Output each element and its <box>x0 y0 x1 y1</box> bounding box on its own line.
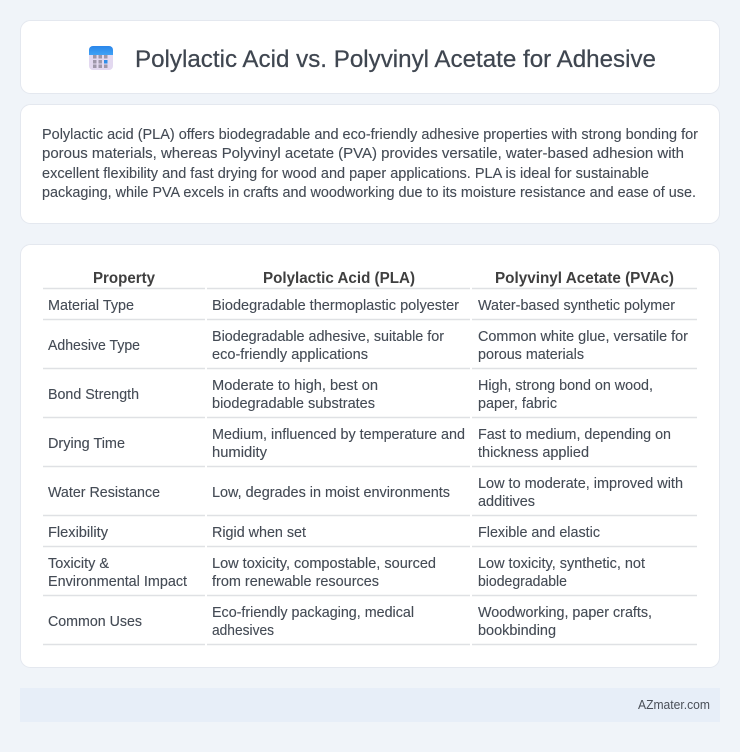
panel: description <box>20 104 720 224</box>
panel: comparison table <box>20 244 720 668</box>
row: common uses: Common Uses <box>48 614 142 630</box>
row: adhesive type: Adhesive Type <box>48 338 140 354</box>
row: drying time: Medium, influenced by temperature and <box>212 427 465 443</box>
row: material type <box>48 298 675 314</box>
table header: Property <box>93 270 155 287</box>
row: drying time: thickness applied <box>478 445 589 461</box>
row: toxicity and environmental impact <box>48 556 645 590</box>
row: bond strength: Moderate to high, best on <box>212 378 378 394</box>
row: toxicity and environmental impact: Toxicity & <box>48 556 109 572</box>
row: water resistance: Water Resistance <box>48 485 160 501</box>
row: water resistance <box>48 476 683 510</box>
row: common uses: Woodworking, paper crafts, <box>478 605 652 621</box>
row: drying time: humidity <box>212 445 268 461</box>
description text: Polylactic acid (PLA) offers biodegradable and eco-friendly adhesive properties with strong bonding for <box>42 127 698 143</box>
row: material type: Water-based synthetic polymer <box>478 298 675 314</box>
row: water resistance: additives <box>478 494 535 510</box>
row: water resistance: Low, degrades in moist environments <box>212 485 450 501</box>
row: adhesive type: Biodegradable adhesive, suitable for <box>212 329 444 345</box>
row: bond strength: High, strong bond on wood, <box>478 378 653 394</box>
row: toxicity and environmental impact: Low toxicity, compostable, sourced <box>212 556 436 572</box>
row: common uses: Eco-friendly packaging, medical <box>212 605 414 621</box>
row: bond strength: paper, fabric <box>478 396 557 412</box>
row: drying time <box>48 427 671 461</box>
table header: Polyvinyl Acetate (PVAc) <box>495 270 674 287</box>
row: toxicity and environmental impact: from renewable resources <box>212 574 379 590</box>
row: toxicity and environmental impact: Low toxicity, synthetic, not <box>478 556 645 572</box>
row: flexibility <box>48 525 600 541</box>
row: material type: Material Type <box>48 298 134 314</box>
row: adhesive type: porous materials <box>478 347 584 363</box>
row: adhesive type: eco-friendly applications <box>212 347 368 363</box>
table header: Polylactic Acid (PLA) <box>263 270 415 287</box>
footer source text: AZmater.com <box>638 698 710 712</box>
row: water resistance: Low to moderate, improved with <box>478 476 683 492</box>
footer <box>20 688 720 722</box>
title: Polylactic Acid vs. Polyvinyl Acetate for Adhesive <box>135 46 656 73</box>
row: adhesive type: Common white glue, versatile for <box>478 329 688 345</box>
row: adhesive type <box>48 329 688 363</box>
row: common uses: adhesives <box>212 623 274 639</box>
description text: packaging, while PVA excels in crafts and woodworking due to its moisture resistance and ease of use. <box>42 185 696 201</box>
row: bond strength <box>48 378 653 412</box>
row: toxicity and environmental impact: Environmental Impact <box>48 574 187 590</box>
row: bond strength: Bond Strength <box>48 387 139 403</box>
row: common uses <box>48 605 652 639</box>
description text: porous materials, whereas Polyvinyl acetate (PVA) provides versatile, water-based adhesion with <box>42 146 684 162</box>
panel: title card <box>20 20 720 94</box>
row: toxicity and environmental impact: biodegradable <box>478 574 567 590</box>
table header <box>93 270 674 287</box>
row: flexibility: Rigid when set <box>212 525 306 541</box>
row: common uses: bookbinding <box>478 623 556 639</box>
description text <box>42 127 698 201</box>
row: flexibility: Flexible and elastic <box>478 525 600 541</box>
description text: excellent flexibility and fast drying for wood and paper applications. PLA is ideal for sustainable <box>42 166 649 182</box>
row: bond strength: biodegradable substrates <box>212 396 375 412</box>
row: drying time: Drying Time <box>48 436 125 452</box>
table rules <box>43 288 697 644</box>
row: drying time: Fast to medium, depending on <box>478 427 671 443</box>
row: material type: Biodegradable thermoplastic polyester <box>212 298 459 314</box>
row: flexibility: Flexibility <box>48 525 109 541</box>
icon: calendar <box>89 46 113 70</box>
